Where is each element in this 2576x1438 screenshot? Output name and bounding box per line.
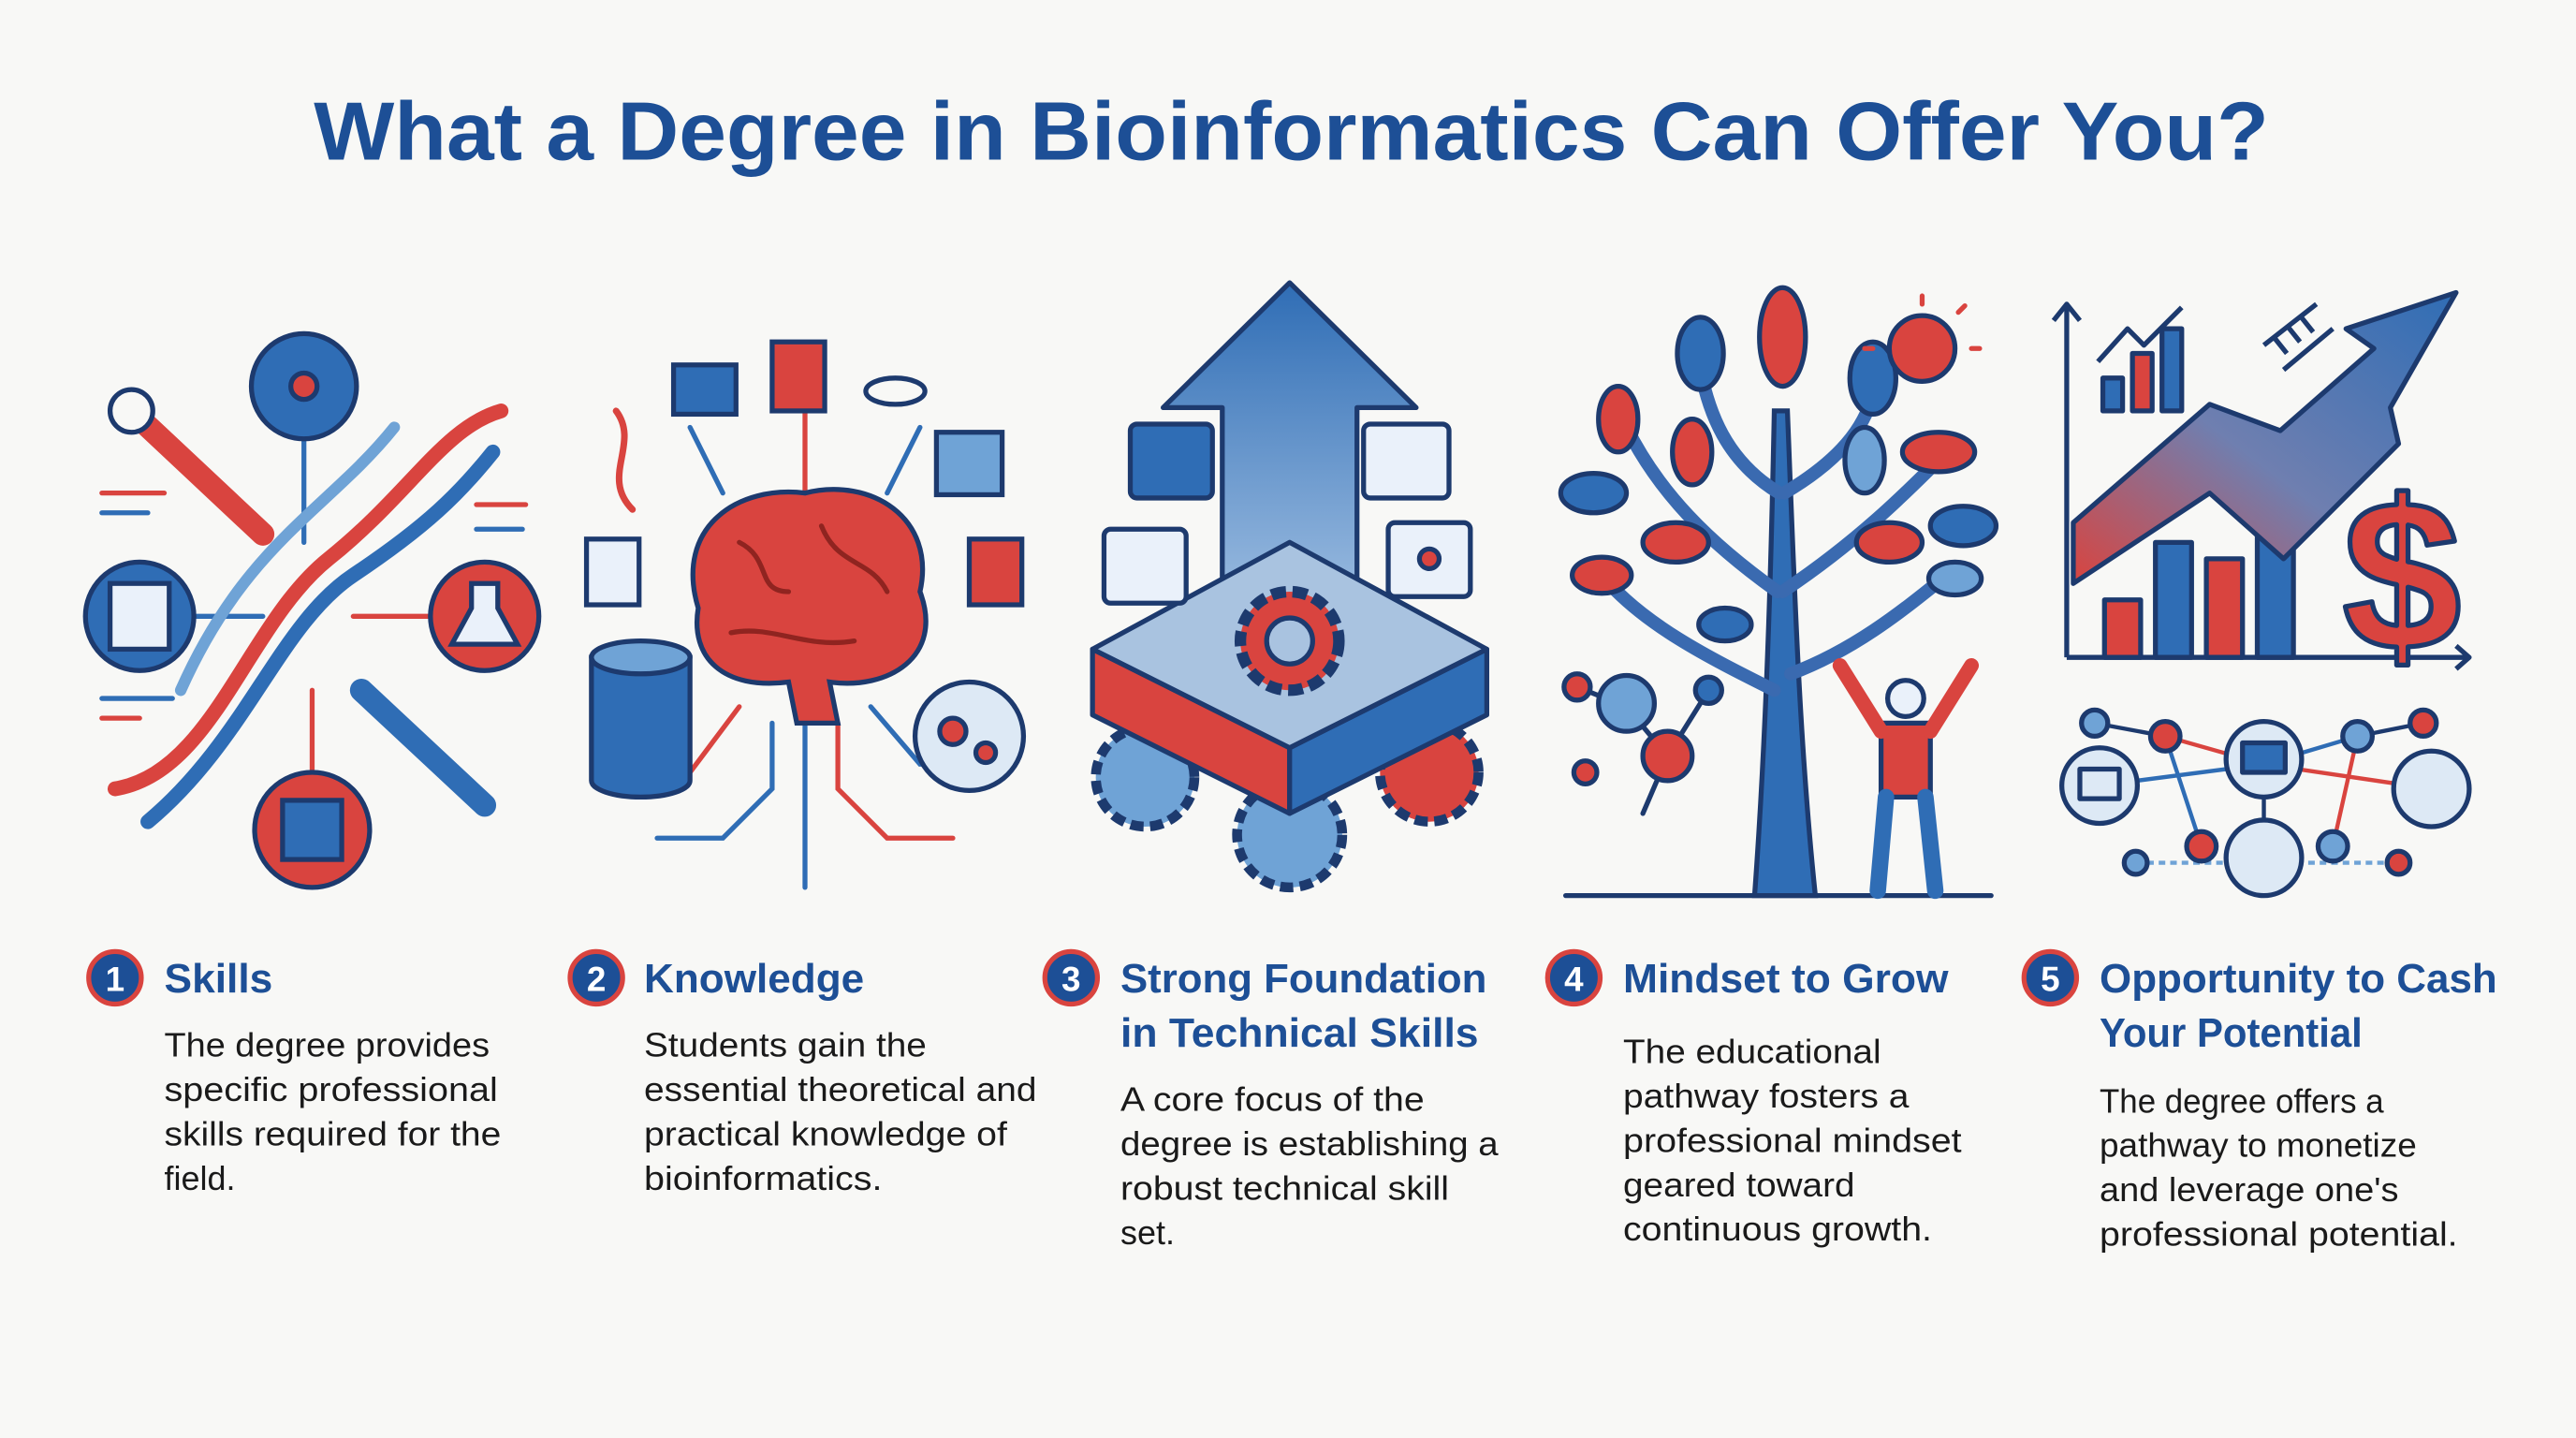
item 4: mindset: professional mindset (1623, 1121, 1962, 1159)
item 4: mindset: The educational (1623, 1033, 1881, 1071)
item 5: opportunity: Opportunity to Cash (2100, 956, 2497, 1002)
item 5: opportunity: Your Potential (2100, 1010, 2363, 1056)
item 2: knowledge: 2 (587, 960, 606, 998)
sun (1889, 315, 1955, 381)
item 3: strong foundation: robust technical skill (1120, 1168, 1449, 1207)
item 1: skills: 1 (106, 960, 124, 998)
title: What a Degree in Bioinformatics Can Offer You? (314, 85, 2269, 177)
item 2: knowledge: bioinformatics. (644, 1159, 882, 1197)
illustration: opportunity (2054, 293, 2469, 896)
item 1: skills: field. (165, 1159, 235, 1197)
ladder (2264, 304, 2333, 370)
item 5: opportunity: 5 (2041, 960, 2060, 998)
gears below (1096, 728, 1194, 827)
item 2: knowledge (570, 951, 1036, 1197)
item 4: mindset: continuous growth. (1623, 1210, 1932, 1248)
item 3: strong foundation: Strong Foundation (1120, 956, 1486, 1002)
item 4: mindset: Mindset to Grow (1623, 956, 1949, 1002)
platform (1092, 649, 1290, 814)
item 1: skills: specific professional (165, 1070, 498, 1108)
item 5: opportunity: professional potential. (2100, 1215, 2458, 1254)
petri dish (915, 682, 1023, 790)
item 1: skills (89, 951, 501, 1197)
item 1: skills: skills required for the (165, 1114, 501, 1152)
item 2: knowledge: essential theoretical and (644, 1070, 1036, 1108)
item 5: opportunity: pathway to monetize (2100, 1126, 2417, 1165)
mini chart (2103, 378, 2123, 411)
item 4: mindset (1547, 951, 1962, 1248)
database (592, 657, 690, 797)
item 2: knowledge: practical knowledge of (644, 1114, 1008, 1152)
item 1: skills: The degree provides (165, 1026, 490, 1064)
windows (1131, 424, 1212, 498)
item 1: skills: Skills (165, 956, 272, 1002)
item 2: knowledge: Students gain the (644, 1026, 927, 1064)
item 5: opportunity (2024, 951, 2497, 1254)
decorative dashes (102, 493, 526, 718)
item 3: strong foundation (1045, 951, 1499, 1252)
item 4: mindset: 4 (1564, 960, 1584, 998)
molecule (1627, 707, 1667, 756)
item 3: strong foundation: degree is establishing a (1120, 1124, 1499, 1163)
item 5: opportunity: The degree offers a (2100, 1081, 2384, 1120)
item 2: knowledge: Knowledge (644, 956, 864, 1002)
illustration: tree and person (1560, 287, 1996, 896)
brain (693, 490, 926, 723)
docs (674, 365, 736, 414)
item 3: strong foundation: 3 (1061, 960, 1081, 998)
screwdriver (361, 690, 485, 805)
illustration: strong foundation (1092, 283, 1486, 888)
item 3: strong foundation: A core focus of the (1120, 1080, 1425, 1119)
zigzag arrow (2073, 293, 2456, 583)
item 3: strong foundation: in Technical Skills (1120, 1010, 1479, 1056)
DNA helix (115, 411, 501, 789)
illustration: skills (85, 333, 539, 888)
dollar: $ (2343, 456, 2461, 695)
illustration: knowledge (587, 342, 1023, 888)
network (2095, 723, 2432, 863)
item 4: mindset: pathway fosters a (1623, 1077, 1909, 1115)
item 3: strong foundation: set. (1120, 1213, 1175, 1252)
item 4: mindset: geared toward (1623, 1166, 1855, 1204)
bars (2104, 600, 2141, 657)
person (1888, 681, 1924, 716)
wrench (131, 411, 263, 535)
item 5: opportunity: and leverage one's (2100, 1170, 2398, 1209)
